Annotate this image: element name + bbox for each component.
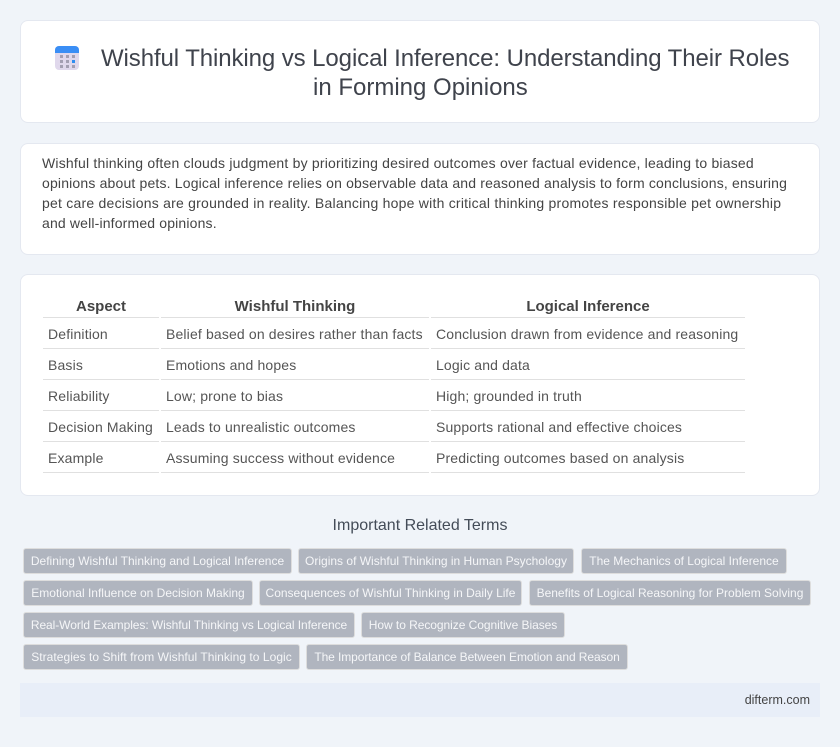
table: comparison: Emotions and hopes bbox=[166, 357, 296, 373]
panel: description bbox=[20, 143, 820, 255]
footer bar bbox=[20, 683, 820, 717]
table: comparison: Assuming success without evidence bbox=[166, 450, 395, 466]
footer text: difterm.com bbox=[745, 693, 810, 707]
tag group: related terms bbox=[23, 548, 811, 670]
text block: description: pet care decisions are grounded in reality. Balancing hope with critical thinking promotes responsible pet ownership bbox=[42, 195, 781, 211]
tag group: related terms: Consequences of Wishful Thinking in Daily Life bbox=[266, 586, 515, 600]
tag group: related terms: Emotional Influence on Decision Making bbox=[31, 586, 245, 600]
table: comparison: Conclusion drawn from evidence and reasoning bbox=[436, 326, 738, 342]
table: comparison: Predicting outcomes based on analysis bbox=[436, 450, 684, 466]
heading: related terms: Important Related Terms bbox=[333, 517, 507, 534]
table: comparison: Belief based on desires rather than facts bbox=[166, 326, 423, 342]
tag group: related terms: Benefits of Logical Reasoning for Problem Solving bbox=[537, 586, 803, 600]
table: comparison: Low; prone to bias bbox=[166, 388, 283, 404]
title: Wishful Thinking vs Logical Inference: Understanding Their Roles bbox=[101, 45, 789, 72]
tag group: related terms: How to Recognize Cognitive Biases bbox=[369, 618, 557, 632]
icon: calendar bbox=[55, 46, 79, 70]
tag group: related terms: The Mechanics of Logical Inference bbox=[589, 554, 779, 568]
text block: description bbox=[42, 155, 787, 231]
title: in Forming Opinions bbox=[313, 74, 528, 101]
table: comparison: Reliability bbox=[48, 388, 110, 404]
tag group: related terms: The Importance of Balance Between Emotion and Reason bbox=[314, 650, 620, 664]
text block: description: opinions about pets. Logical inference relies on observable data and reasoned analysis to form conclusions, ensuring bbox=[42, 175, 787, 191]
table: comparison: Example bbox=[48, 450, 104, 466]
table: comparison: Basis bbox=[48, 357, 83, 373]
table: comparison: Aspect bbox=[76, 298, 126, 315]
table: comparison: Leads to unrealistic outcomes bbox=[166, 419, 356, 435]
table: comparison: Logical Inference bbox=[526, 298, 650, 315]
title bbox=[101, 45, 789, 101]
text block: description: Wishful thinking often clouds judgment by prioritizing desired outcomes over factual evidence, leading to biased bbox=[42, 155, 754, 171]
tag group: related terms: Origins of Wishful Thinking in Human Psychology bbox=[305, 554, 567, 568]
table: comparison: Supports rational and effective choices bbox=[436, 419, 682, 435]
tag group: related terms: Defining Wishful Thinking and Logical Inference bbox=[31, 554, 284, 568]
tag group: related terms: Real-World Examples: Wishful Thinking vs Logical Inference bbox=[31, 618, 347, 632]
table: comparison: High; grounded in truth bbox=[436, 388, 582, 404]
panel: comparison table bbox=[20, 274, 820, 496]
table: comparison bbox=[43, 298, 745, 473]
table: comparison: Definition bbox=[48, 326, 108, 342]
text block: description: and well-informed opinions. bbox=[42, 215, 217, 231]
table: comparison: Logic and data bbox=[436, 357, 530, 373]
tag group: related terms: Strategies to Shift from Wishful Thinking to Logic bbox=[31, 650, 292, 664]
panel: header bbox=[20, 20, 820, 123]
table: comparison: Decision Making bbox=[48, 419, 153, 435]
table: comparison: Wishful Thinking bbox=[235, 298, 355, 315]
